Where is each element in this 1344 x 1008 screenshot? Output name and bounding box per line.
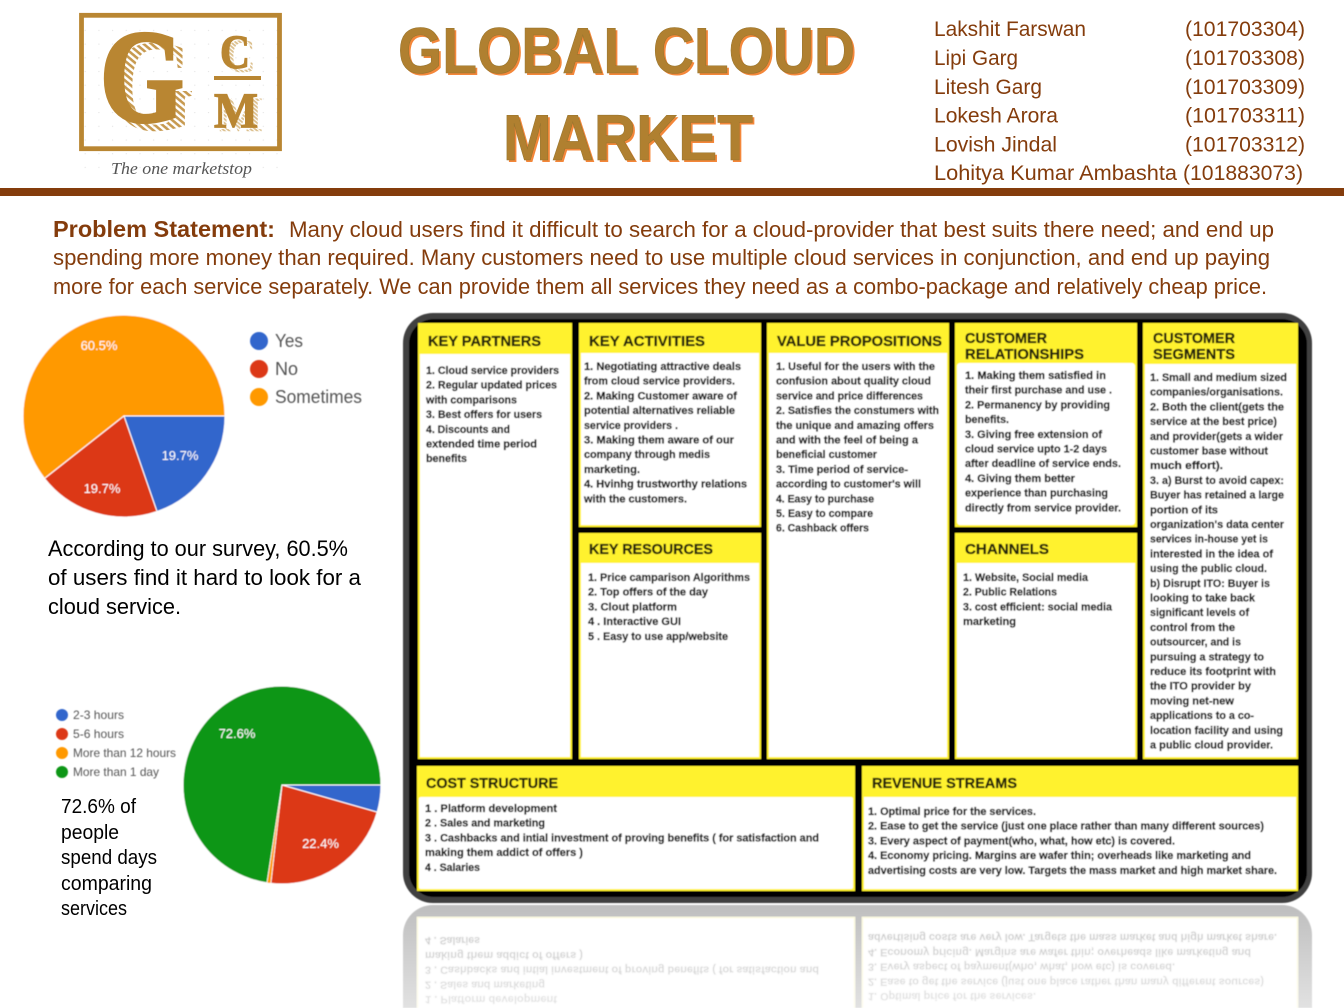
text block: experience than purchasing (965, 488, 1108, 500)
title (398, 14, 857, 176)
survey text 2: spend days (61, 847, 157, 869)
heading (965, 330, 1084, 363)
text block: 4. Economy pricing. Margins are wafer thin; overheads like marketing and (868, 850, 1251, 862)
survey text 2: services (61, 898, 127, 920)
heading: CHANNELS (965, 541, 1049, 558)
text block: the ITO provider by (1150, 681, 1252, 693)
text block: benefits. (965, 414, 1009, 426)
logo letter G: G (109, 12, 195, 159)
text block: marketing. (584, 464, 640, 476)
text block: their first purchase and use . (965, 385, 1112, 397)
heading: CUSTOMER (965, 330, 1047, 347)
pie labels: 22.4% (302, 836, 339, 851)
team member names: Lohitya Kumar Ambashta (934, 162, 1177, 185)
text block: 3. a) Burst to avoid capex: (1150, 475, 1284, 487)
slice: 2-3 hours (282, 785, 381, 812)
pie chart: time spent comparing (183, 686, 381, 884)
pie labels: 60.5% (81, 338, 118, 353)
text block (963, 572, 1113, 628)
text block: 2. Satisfies the constumers with (776, 405, 939, 417)
text block: potential alternatives reliable (584, 405, 735, 417)
text block: 5 . Easy to use app/website (588, 631, 728, 643)
slice: More than 1 day 72.6% (183, 686, 381, 883)
team member names: (101703312) (1185, 134, 1305, 156)
problem statement (53, 216, 1274, 299)
text block (425, 803, 819, 874)
title: MARKET (503, 101, 753, 174)
legend: second pie: More than 1 day (73, 765, 159, 779)
text block: after deadline of service ends. (965, 458, 1121, 470)
business model canvas (403, 313, 1312, 903)
canvas reflection: 4 . Salaries (425, 934, 480, 946)
team member names: Litesh Garg (934, 76, 1042, 99)
legend: second pie: More than 12 hours (73, 746, 176, 760)
canvas frame (403, 313, 1312, 903)
text block (868, 806, 1277, 877)
heading: KEY PARTNERS (428, 333, 541, 350)
text block: Buyer has retained a large (1150, 490, 1284, 502)
pie labels (81, 338, 199, 496)
text block: 2. Ease to get the service (just one place rather than many different sources) (868, 821, 1264, 833)
text block: 1. Cloud service providers (426, 365, 559, 377)
text block: b) Disrupt ITO: Buyer is (1150, 578, 1270, 590)
text block: 3. Every aspect of payment(who, what, how etc) is covered. (868, 835, 1175, 847)
heading: COST STRUCTURE (426, 775, 558, 792)
logo frame (82, 15, 280, 149)
panel: cost structure (417, 766, 855, 891)
pie chart: difficulty finding a cloud service (23, 315, 225, 517)
text block: 1 . Platform development (425, 803, 557, 815)
text block: location facility and using (1150, 725, 1283, 737)
survey text 1 (48, 536, 362, 619)
text block: 1. Price camparison Algorithms (588, 572, 750, 584)
title: MARKET (505, 103, 755, 176)
text block: pursuing a strategy to (1150, 651, 1264, 663)
text block: moving net-new (1150, 695, 1234, 707)
text block: advertising costs are very low. Targets the mass market and high market share. (868, 865, 1277, 877)
heading: RELATIONSHIPS (965, 346, 1084, 363)
canvas reflection: making them addict of offers ) (425, 949, 583, 961)
text block: companies/organisations. (1150, 387, 1283, 399)
heading: VALUE PROPOSITIONS (777, 333, 942, 350)
text block: 2. Permanency by providing (965, 399, 1110, 411)
text block (588, 572, 750, 643)
text block: outsourcer, and is (1150, 637, 1241, 649)
text block: service providers . (584, 420, 678, 432)
text block: cloud service upto 1-2 days (965, 444, 1107, 456)
pie labels: 19.7% (162, 448, 199, 463)
team member names: (101703304) (1185, 18, 1305, 41)
text block: 5. Easy to compare (776, 508, 873, 520)
survey text 1: According to our survey, 60.5% (48, 536, 348, 561)
text block: the unique and amazing offers (776, 420, 934, 432)
canvas reflection: 1. Optimal price for the services. (868, 990, 1036, 1002)
panel: key partners (418, 323, 572, 759)
text block: 3. Best offers for users (426, 409, 542, 421)
text block (583, 361, 747, 505)
logo letter M: M (214, 82, 258, 138)
text block: 1. Useful for the users with the (776, 361, 935, 373)
heading: CUSTOMER (1153, 330, 1235, 347)
text block: 2. Making Customer aware of (584, 390, 737, 402)
text block: using the public cloud. (1150, 563, 1267, 575)
logo letter G: G (100, 3, 184, 150)
text block: 3. Giving free extension of (965, 429, 1102, 441)
canvas reflection: 3. Every aspect of payment(who, what, how etc) is covered. (868, 961, 1175, 973)
legend: first pie (250, 331, 362, 407)
text block (425, 365, 559, 465)
text block (1150, 372, 1287, 752)
text block: 3. Clout platform (588, 601, 677, 613)
text block: 4. Easy to purchase (776, 493, 874, 505)
legend: first pie: Sometimes (275, 387, 362, 407)
team member names: Lipi Garg (934, 47, 1018, 70)
canvas reflection: 2 . Sales and marketing (425, 978, 545, 990)
title: GLOBAL CLOUD (400, 16, 857, 89)
logo letter M: M (219, 86, 263, 142)
text block: a public cloud provider. (1150, 740, 1273, 752)
text block: 4 . Interactive GUI (588, 616, 681, 628)
logo letter C: C (220, 26, 250, 79)
text block: and provider(gets a wider (1150, 431, 1284, 443)
text block: 2 . Sales and marketing (425, 818, 545, 830)
title: GLOBAL CLOUD (398, 14, 855, 87)
text block: benefits (426, 453, 467, 465)
survey text 2: 72.6% of (61, 796, 136, 818)
heading: SEGMENTS (1153, 346, 1235, 363)
text block: interested in the idea of (1150, 548, 1273, 560)
text block: 1. Optimal price for the services. (868, 806, 1036, 818)
text block: reduce its footprint with (1150, 666, 1276, 678)
text block: 3 . Cashbacks and intial investment of proving benefits ( for satisfaction and (425, 832, 819, 844)
text block: 4. Giving them better (965, 473, 1076, 485)
text block: 6. Cashback offers (776, 523, 869, 535)
pie labels (219, 726, 339, 851)
problem statement: Many cloud users find it difficult to search for a cloud-provider that best suits there need; and end up (289, 217, 1274, 242)
text block: making them addict of offers ) (425, 847, 583, 859)
canvas reflection: 3 . Cashbacks and intial investment of proving benefits ( for satisfaction and (425, 964, 819, 976)
text block: 1. Website, Social media (963, 572, 1089, 584)
text block: 4. Hvinhg trustworthy relations (584, 479, 747, 491)
text block: 3. Making them aware of our (584, 434, 735, 446)
panel: revenue streams (862, 766, 1298, 891)
pie labels: 19.7% (84, 481, 121, 496)
legend: second pie: 5-6 hours (73, 727, 124, 741)
text block: looking to take back (1150, 592, 1256, 604)
survey text 2: comparing (61, 873, 152, 895)
team member names: (101703309) (1185, 76, 1305, 99)
text block: from cloud service providers. (584, 376, 735, 388)
team member names: (101703311) (1185, 104, 1305, 128)
team member names: (101703308) (1185, 47, 1305, 70)
text block: company through medis (584, 449, 710, 461)
text block: 3. cost efficient: social media (963, 601, 1113, 613)
text block: service and price differences (776, 390, 923, 402)
heading: REVENUE STREAMS (872, 775, 1017, 792)
text block: applications to a co- (1150, 710, 1254, 722)
text block (965, 370, 1121, 514)
text block: portion of its (1150, 504, 1218, 516)
text block: 4. Discounts and (426, 424, 510, 436)
team member names: Lovish Jindal (934, 134, 1057, 156)
problem statement: more for each service separately. We can provide them all services they need as a combo-package and relatively cheap price. (53, 274, 1267, 299)
panel: value propositions (767, 323, 949, 759)
text block: 3. Time period of service- (776, 464, 908, 476)
team member names: (101883073) (1183, 162, 1303, 185)
slice: More than 12 hours (267, 785, 282, 883)
text block: significant levels of (1150, 607, 1249, 619)
header divider bar (0, 188, 1344, 196)
text block: with comparisons (425, 394, 517, 406)
text block: beneficial customer (776, 449, 878, 461)
text block: according to customer's will (776, 479, 921, 491)
team member names: Lokesh Arora (934, 104, 1058, 128)
team member names: Lakshit Farswan (934, 18, 1086, 41)
logo (79, 3, 282, 178)
heading (1153, 330, 1235, 363)
slice: Yes 19.7% (124, 416, 225, 512)
text block: customer base without (1150, 446, 1268, 458)
text block: services in-house yet is (1150, 534, 1268, 546)
legend: first pie: Yes (275, 331, 303, 351)
panel: customer segments (1143, 323, 1298, 759)
panel: customer relationships (955, 323, 1137, 527)
text block: 2. Regular updated prices (426, 380, 557, 392)
canvas reflection: 2. Ease to get the service (just one place rather than many different sources) (868, 975, 1264, 987)
text block: marketing (963, 616, 1016, 628)
text block: 1. Making them satisfied in (965, 370, 1106, 382)
text block: confusion about quality cloud (776, 376, 931, 388)
text block: 2. Both the client(gets the (1150, 401, 1284, 413)
text block: extended time period (426, 438, 537, 450)
problem statement: Problem Statement: (53, 216, 275, 242)
survey text 1: cloud service. (48, 594, 181, 619)
text block: with the customers. (583, 493, 687, 505)
heading: KEY ACTIVITIES (589, 333, 705, 350)
logo letter C: C (224, 30, 256, 83)
team member names (934, 18, 1305, 185)
text block: control from the (1150, 622, 1235, 634)
pie labels: 72.6% (219, 726, 256, 741)
survey text 2 (61, 796, 157, 920)
text block: organization's data center (1150, 519, 1285, 531)
panel: key activities (579, 323, 761, 527)
slice: 5-6 hours 22.4% (271, 785, 377, 884)
canvas reflection (395, 904, 1325, 1008)
problem statement: spending more money than required. Many customers need to use multiple cloud services in conjunction, and end up paying (53, 245, 1270, 270)
slice: No 19.7% (45, 416, 157, 517)
panel: channels (955, 533, 1137, 759)
canvas reflection: advertising costs are very low. Targets the mass market and high market share. (868, 931, 1277, 943)
survey text 2: people (61, 822, 119, 844)
survey text 1: of users find it hard to look for a (48, 565, 362, 590)
text block: directly from service provider. (965, 502, 1121, 514)
text block: and with the feel of being a (776, 434, 919, 446)
text block: 1. Small and medium sized (1150, 372, 1287, 384)
legend: second pie: 2-3 hours (73, 708, 124, 722)
text block: much effort). (1150, 460, 1223, 472)
text block: 4 . Salaries (425, 862, 480, 874)
canvas reflection: 1 . Platform development (425, 993, 557, 1005)
panel: key resources (579, 533, 761, 759)
text block: service at the best price) (1150, 416, 1277, 428)
canvas reflection: 4. Economy pricing. Margins are wafer thin; overheads like marketing and (868, 946, 1251, 958)
logo divider (214, 76, 261, 80)
logo tagline: The one marketstop (111, 159, 252, 178)
legend: second pie (56, 708, 176, 779)
text block: 2. Public Relations (963, 587, 1057, 599)
legend: first pie: No (275, 359, 298, 379)
text block: 1. Negotiating attractive deals (584, 361, 741, 373)
slice: Sometimes 60.5% (23, 315, 225, 478)
text block: 2. Top offers of the day (588, 587, 709, 599)
heading: KEY RESOURCES (589, 541, 713, 558)
text block (776, 361, 939, 535)
